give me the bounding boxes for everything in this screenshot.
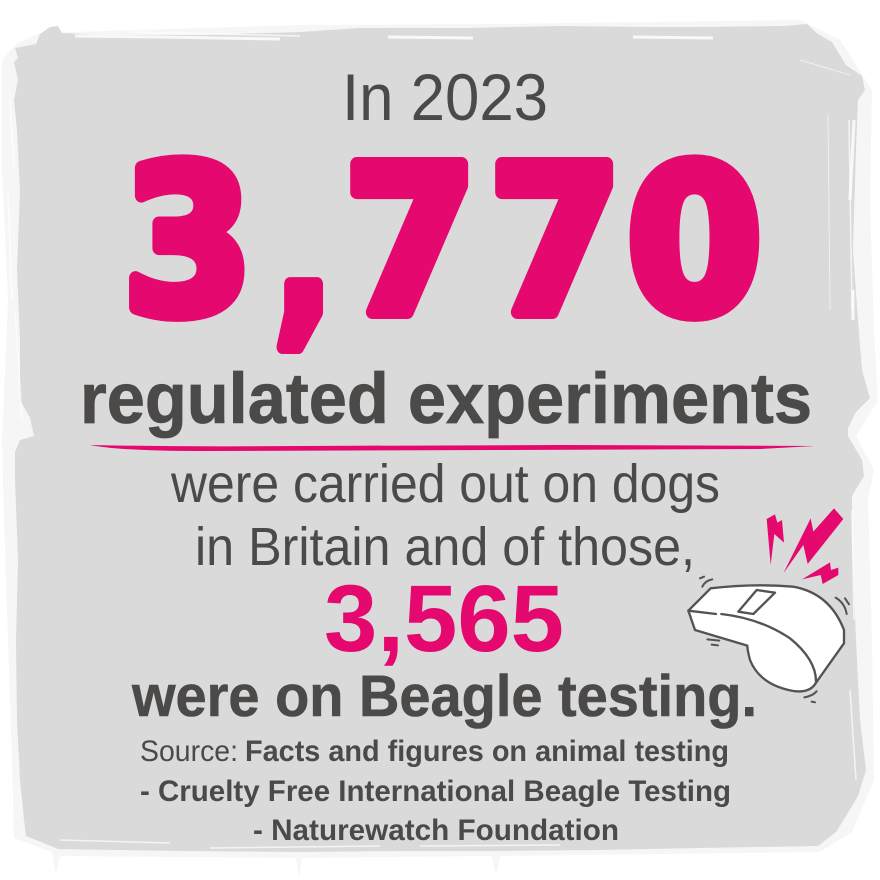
icon: whistle with sound bolts xyxy=(688,508,849,702)
text line: were on Beagle testing: were on Beagle testing. xyxy=(131,664,757,729)
whistle body xyxy=(688,585,844,691)
source title 1: Facts and figures on animal testing xyxy=(245,735,729,768)
big number: 3,770: 3 xyxy=(123,124,253,360)
source line 1: Source: xyxy=(140,735,238,768)
big number: 3,770: , xyxy=(274,144,333,365)
text line: were carried out on dogs: were carried out on dogs xyxy=(170,454,720,514)
big number: 3,770: 7 xyxy=(489,124,622,360)
source line 2: - Cruelty Free International Beagle Testing xyxy=(140,775,731,808)
big number: 3,770 xyxy=(123,124,762,365)
big number: 3,770: 7 xyxy=(344,124,477,360)
whistle details xyxy=(688,590,816,683)
big number: 3,770: 0 xyxy=(627,124,762,360)
source line 3: - Naturewatch Foundation xyxy=(253,814,619,847)
text line: in Britain and of those: in Britain and of those, xyxy=(195,517,695,577)
pink brush underline xyxy=(90,445,815,451)
sound bolts xyxy=(767,508,843,584)
source text xyxy=(140,735,731,847)
heading: In 2023: In 2023 xyxy=(342,60,548,134)
number: 3,565: 3,565 xyxy=(324,566,564,672)
subheading: regulated experiments: regulated experiments xyxy=(80,360,812,439)
vibration marks xyxy=(700,577,849,702)
